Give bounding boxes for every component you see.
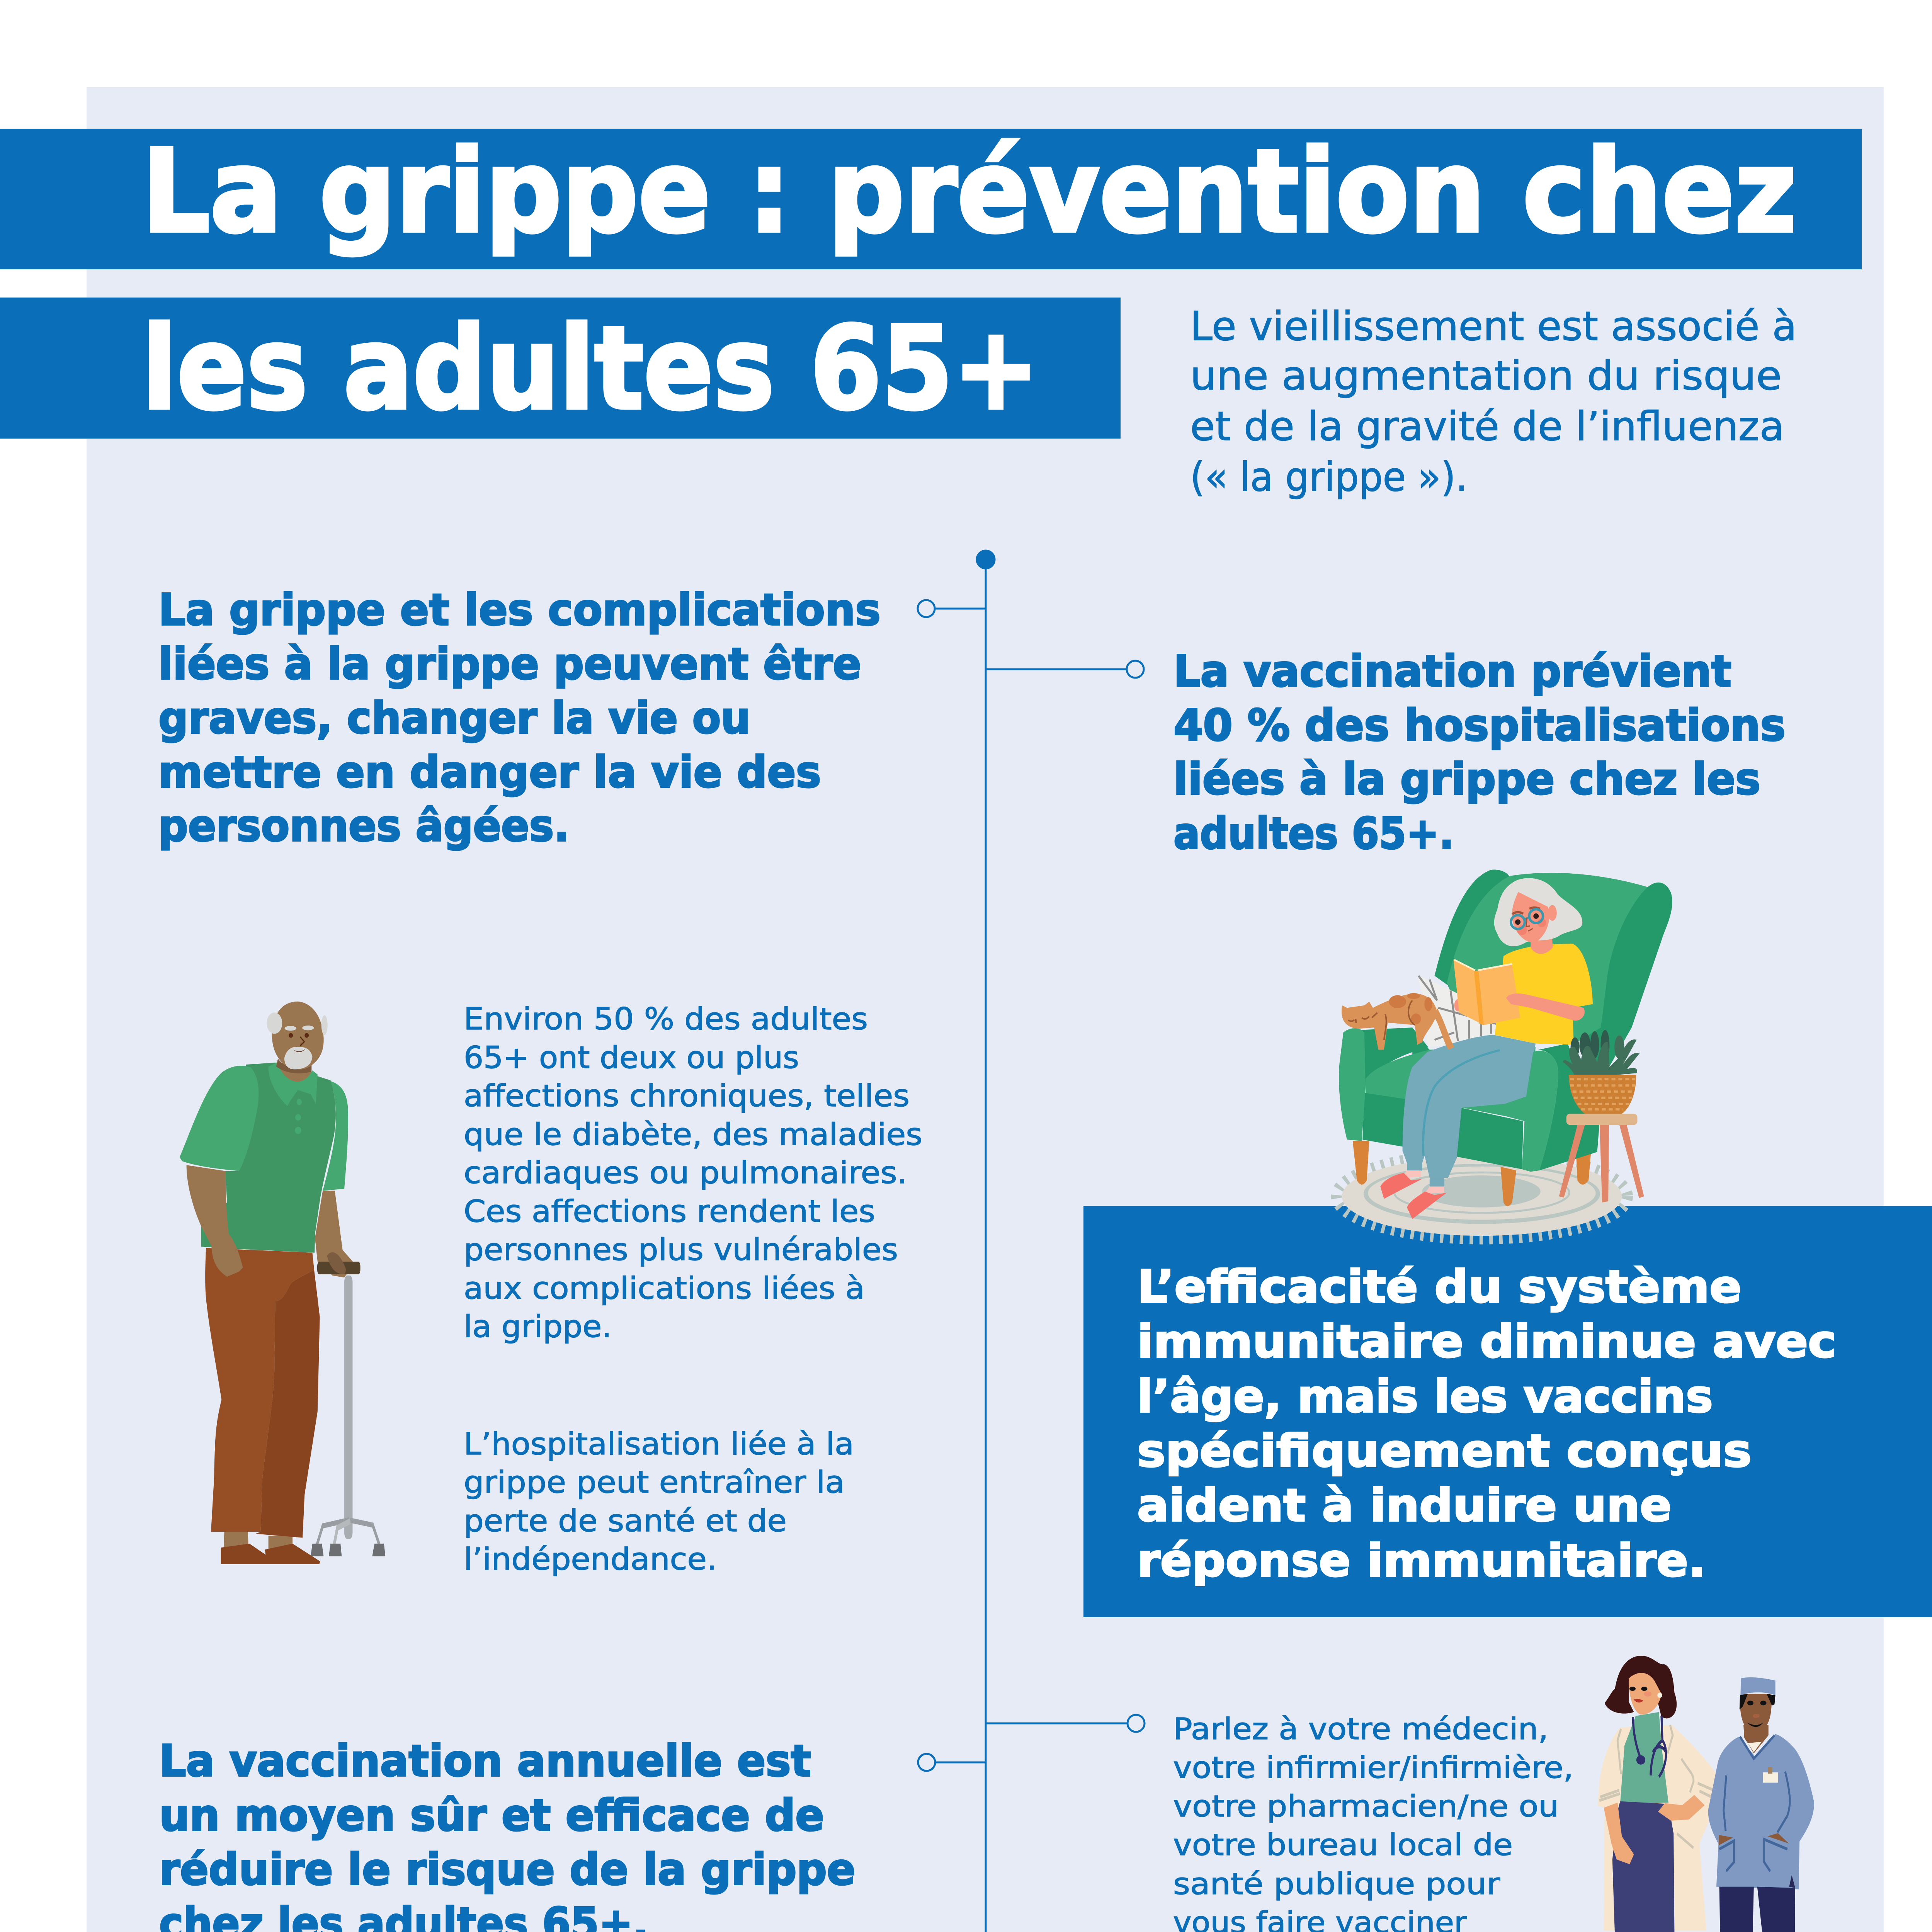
body text: chronic conditions: cardiaques ou pulmonaires. <box>464 1156 907 1190</box>
heading: annual vaccination: un moyen sûr et efficace de <box>159 1791 824 1841</box>
heading: annual vaccination: réduire le risque de la grippe <box>159 1845 855 1895</box>
heading: complications: mettre en danger la vie des <box>158 747 821 798</box>
body text: talk to your provider: Parlez à votre médecin, <box>1173 1712 1548 1747</box>
body text: hospitalization: l’indépendance. <box>464 1542 717 1577</box>
icon: woman reading in armchair <box>1337 870 1672 1239</box>
heading: annual vaccination: La vaccination annuelle est <box>159 1736 811 1786</box>
title banner <box>0 125 1862 439</box>
body text: hospitalization: grippe peut entraîner la <box>464 1465 845 1500</box>
body text: chronic conditions: Ces affections rendent les <box>464 1194 875 1229</box>
title line 1: La grippe : prévention chez <box>142 125 1797 258</box>
panel: immune system callout: l’âge, mais les vaccins <box>1137 1371 1713 1423</box>
body text: chronic conditions: que le diabète, des maladies <box>464 1117 922 1152</box>
heading: vaccination 40 %: adultes 65+. <box>1173 809 1454 859</box>
body text: chronic conditions: aux complications liées à <box>464 1271 865 1306</box>
heading: vaccination 40 %: 40 % des hospitalisations <box>1173 701 1786 751</box>
intro text <box>1190 303 1797 500</box>
body text: hospitalization: L’hospitalisation liée à la <box>464 1427 854 1462</box>
body text: talk to your provider: votre pharmacien/ne ou <box>1173 1789 1559 1824</box>
body text: chronic conditions: 65+ ont deux ou plus <box>464 1041 799 1075</box>
panel: immune system callout: L’efficacité du système <box>1137 1261 1742 1313</box>
panel: immune system callout: spécifiquement conçus <box>1137 1425 1752 1477</box>
body text: chronic conditions <box>464 1002 922 1344</box>
panel: immune system callout: réponse immunitaire. <box>1137 1535 1706 1587</box>
body text: talk to your provider: votre infirmier/infirmière, <box>1173 1751 1573 1785</box>
heading: complications: liées à la grippe peuvent être <box>158 639 861 689</box>
body text: chronic conditions: la grippe. <box>464 1310 612 1344</box>
body text: chronic conditions: personnes plus vulnérables <box>464 1233 898 1267</box>
intro text: Le vieillissement est associé à <box>1190 303 1797 350</box>
body text: talk to your provider: santé publique pour <box>1173 1867 1500 1901</box>
body text: chronic conditions: affections chroniques, telles <box>464 1079 910 1114</box>
title line 2: les adultes 65+ <box>142 302 1039 435</box>
icon: older man with cane <box>180 1002 385 1564</box>
panel: immune system callout: immunitaire diminue avec <box>1137 1316 1836 1368</box>
body text: talk to your provider: votre bureau local de <box>1173 1828 1513 1862</box>
body text: hospitalization <box>464 1427 854 1577</box>
intro text: une augmentation du risque <box>1190 353 1782 399</box>
heading: vaccination 40 %: liées à la grippe chez les <box>1173 754 1760 804</box>
intro text: (« la grippe »). <box>1190 454 1468 500</box>
icon: doctor and nurse <box>1598 1656 1814 1932</box>
heading: vaccination 40 %: La vaccination prévient <box>1173 646 1731 697</box>
heading: complications: graves, changer la vie ou <box>158 693 750 743</box>
heading: annual vaccination <box>159 1736 855 1932</box>
body text: chronic conditions: Environ 50 % des adultes <box>464 1002 868 1037</box>
heading: complications <box>158 585 881 851</box>
timeline axis with connectors <box>918 551 1145 1932</box>
heading: vaccination 40 % <box>1173 646 1786 859</box>
panel: immune system callout <box>1083 1206 1932 1617</box>
intro text: et de la gravité de l’influenza <box>1190 403 1784 450</box>
body text: hospitalization: perte de santé et de <box>464 1504 787 1539</box>
heading: complications: personnes âgées. <box>158 801 570 851</box>
panel: immune system callout: aident à induire une <box>1137 1480 1672 1532</box>
heading: complications: La grippe et les complications <box>158 585 881 635</box>
body text: talk to your provider <box>1173 1712 1573 1932</box>
